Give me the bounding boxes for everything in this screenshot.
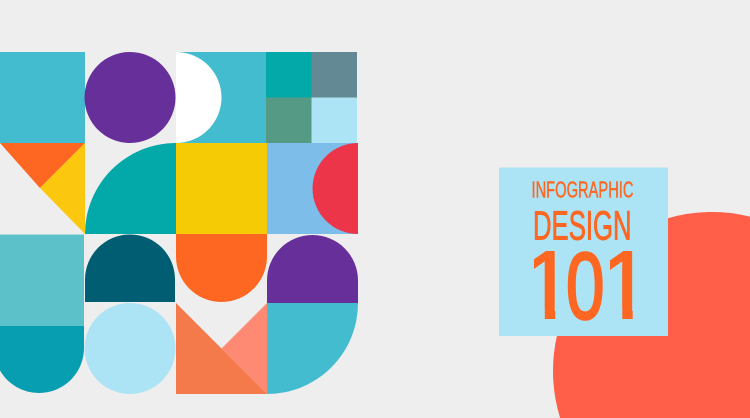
title: 101: 0 [566,234,604,340]
title: infographic: INFOGRAPHIC [532,176,634,202]
tile: purple circle [84,52,176,143]
tile: teal quarter circle [85,143,176,234]
title: 101 [534,251,633,321]
tile: orange rounded bottom shape [176,234,267,302]
tile: pale blue circle [84,303,176,394]
panel: geometric tile mosaic [0,52,358,394]
tile: four small squares [266,52,357,143]
tile: teal rounded bottom shape [0,326,84,393]
tile: orange and yellow triangles [0,143,85,234]
title: design: DESIGN [533,202,632,248]
title card background [499,168,668,336]
tile: blue quarter round shape [267,303,358,394]
tile: blue square with white half circle [176,52,266,143]
tile: light blue square with red half circle [267,143,358,234]
tile: dark teal arch [85,234,175,302]
title: 101: 1 [598,231,652,340]
tile: blue square [0,52,85,143]
tile: pale teal square [0,234,84,326]
title card [499,168,668,340]
decorative large coral circle [553,212,750,418]
tile: yellow square [176,143,267,234]
tile: purple arch [267,235,358,303]
title: 101: 1 [521,231,575,340]
tile: coral triangles [176,303,267,394]
